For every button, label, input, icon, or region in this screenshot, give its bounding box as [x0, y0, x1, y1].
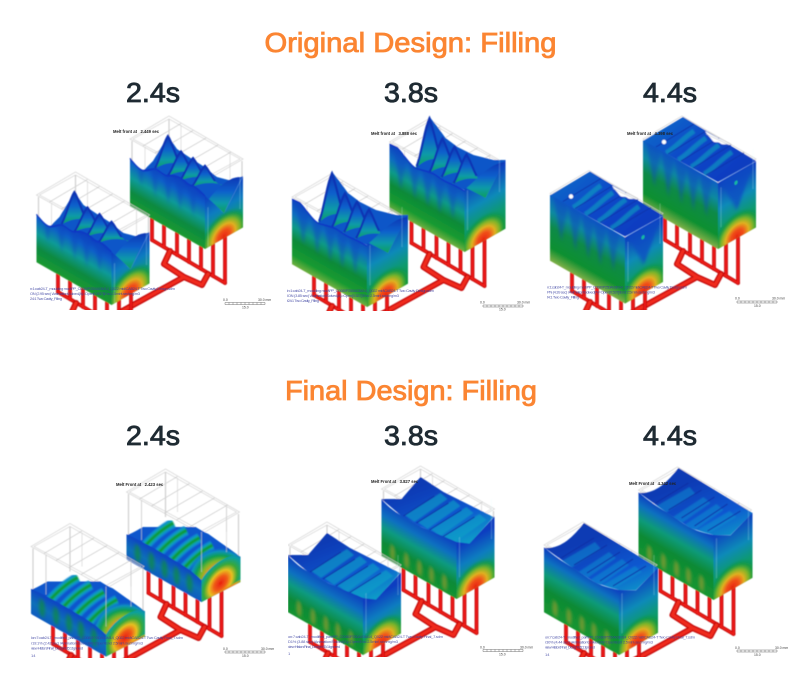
run info line 4: 14 — [545, 652, 550, 657]
run info line 2: ION (3.85 sec) \Animation\Solved{A}=Open[0.537]\End 2.5min\ sec\mg/m3 — [287, 293, 400, 298]
scale bar: 0.0 — [223, 647, 228, 651]
scale bar: 15.0 — [499, 652, 506, 656]
melt front caption: Melt Front at 2.423 sec — [116, 482, 164, 487]
time label: original 4.4s: 4.4s — [643, 77, 697, 108]
scale bar: 30.0 mm — [517, 300, 530, 304]
scale bar — [480, 646, 533, 656]
scale bar: 30.0 mm — [258, 298, 271, 302]
scale bar: 15.0 — [242, 654, 249, 658]
time label: original 3.8s: 3.8s — [384, 77, 438, 108]
scale bar: 0.0 — [480, 646, 485, 650]
scale bar — [480, 300, 530, 312]
scale bar: 30.0 mm — [261, 647, 274, 651]
simulation: original design at 3.8s — [287, 115, 530, 311]
time label: final 2.4s: 2.4s — [126, 420, 180, 451]
scale bar: 0.0 — [735, 646, 740, 650]
scale bar: 0.0 — [735, 296, 740, 300]
scale bar — [223, 647, 274, 658]
scale bar — [735, 296, 785, 308]
heading: final design: Final Design: Filling — [285, 375, 537, 406]
scale bar: 30.0 mm — [520, 646, 533, 650]
scale bar: 15.0 — [499, 308, 506, 312]
run info line 3: view Histon:Final_Design\S5:1:Ignored — [545, 644, 595, 650]
run info line 4: 14 — [31, 653, 36, 658]
run info text: in:1:cab24-T_moulding mod\PP_C0080P250A03M14_Q022 mid\CAB24-T Two Cavity Design.sdm — [287, 288, 435, 293]
melt front caption: Melt front at 2.449 sec — [113, 129, 160, 134]
melt front caption: Melt Front at 4.342 sec — [629, 481, 677, 486]
scale bar — [735, 646, 788, 657]
run info text: on:7:cab24-T_modified_part\PP_C0080P250A03M14_Q022 mid\CAB24-T Two Cavity Final_7.sdm — [288, 634, 444, 639]
run info line 3: 24:1 Two Cavity_Filling — [30, 296, 62, 301]
simulation: final design at 4.4s — [543, 466, 788, 657]
run info line 3: view Histon:Final_Design\S5:1:Ignored — [288, 644, 340, 649]
simulation: final design at 3.8s — [288, 466, 533, 657]
run info text: on:7:cab24-T_modified_part\PP_C0080P250A03M14_Q022 mid\CAB24-T Two Cavity Final_7.sdm — [545, 634, 696, 640]
simulation: original design at 2.4s — [30, 116, 271, 310]
run info text: n:1:cab24-T_moulding mod\PP_C0080P250A03M14_Q022 mid\CAB24-T Two Cavity Design.sdm — [547, 284, 688, 290]
run info text: lon:7:cab24-T_modified_part\PP_C0080P250A03M14_Q022 mid\CAB24-T Two Cavity Final_7.sdm — [31, 635, 184, 640]
melt front caption: Melt front at 4.398 sec — [627, 131, 674, 136]
run info line 4: 1 — [288, 651, 291, 656]
scale bar — [223, 298, 271, 310]
melt front caption: Melt front at 3.888 sec — [371, 131, 418, 136]
scale bar: 15.0 — [754, 304, 761, 308]
heading: original design: Original Design: Filling — [264, 27, 556, 58]
time label: final 3.8s: 3.8s — [384, 420, 438, 451]
scale bar: 15.0 — [242, 306, 249, 310]
scale bar: 30.0 mm — [772, 296, 785, 300]
run info line 2: r19:1% (2.42 sec) \Animation\Solved{A}=Open\End 2.5min\ sec\mg/m3 — [31, 640, 144, 646]
run info line 2: D1% (3.88 sec) \Animation\Solved{A}=Open\End 2.5min\ sec\mg/m3 — [288, 639, 399, 644]
scale bar: 30.0 mm — [775, 646, 788, 650]
time label: final 4.4s: 4.4s — [643, 420, 697, 451]
scale bar: 15.0 — [754, 653, 761, 657]
run info line 3: view Histon:Final_Design\S5:1:Ignored — [31, 646, 83, 650]
simulation: final design at 2.4s — [30, 468, 274, 658]
run info line 2: r30% (4.44 sec) \Animation\Solved{A}=Open\End 2.5min\ sec\mg/m3 — [545, 640, 654, 644]
time label: original 2.4s: 2.4s — [126, 77, 180, 108]
run info text: n:1:cab24-T_moulding mod\PP_C0080P250A03M14_Q022 mid\CAB24-T Two Cavity Design.sdm — [30, 286, 176, 291]
run info line 3: t24:1 Two Cavity_Filling — [287, 298, 319, 303]
scale bar: 0.0 — [480, 300, 485, 304]
run info line 3: t4:1 Two Cavity_Filling — [547, 294, 579, 300]
melt front caption: Melt Front at 3.827 sec — [371, 479, 419, 484]
scale bar: 0.0 — [223, 298, 228, 302]
simulation: original design at 4.4s — [547, 116, 785, 310]
run info line 2: PN (4.39 sec) \Animation\Solved{A}=Open[0.537]\End 2.5min\ sec\mg/m3 — [547, 290, 656, 294]
run info line 2: ON (2.95 sec) \Animation\Solved{A}=Open[0.537]\End 2.5min\ sec\mg/m3 — [30, 291, 141, 296]
